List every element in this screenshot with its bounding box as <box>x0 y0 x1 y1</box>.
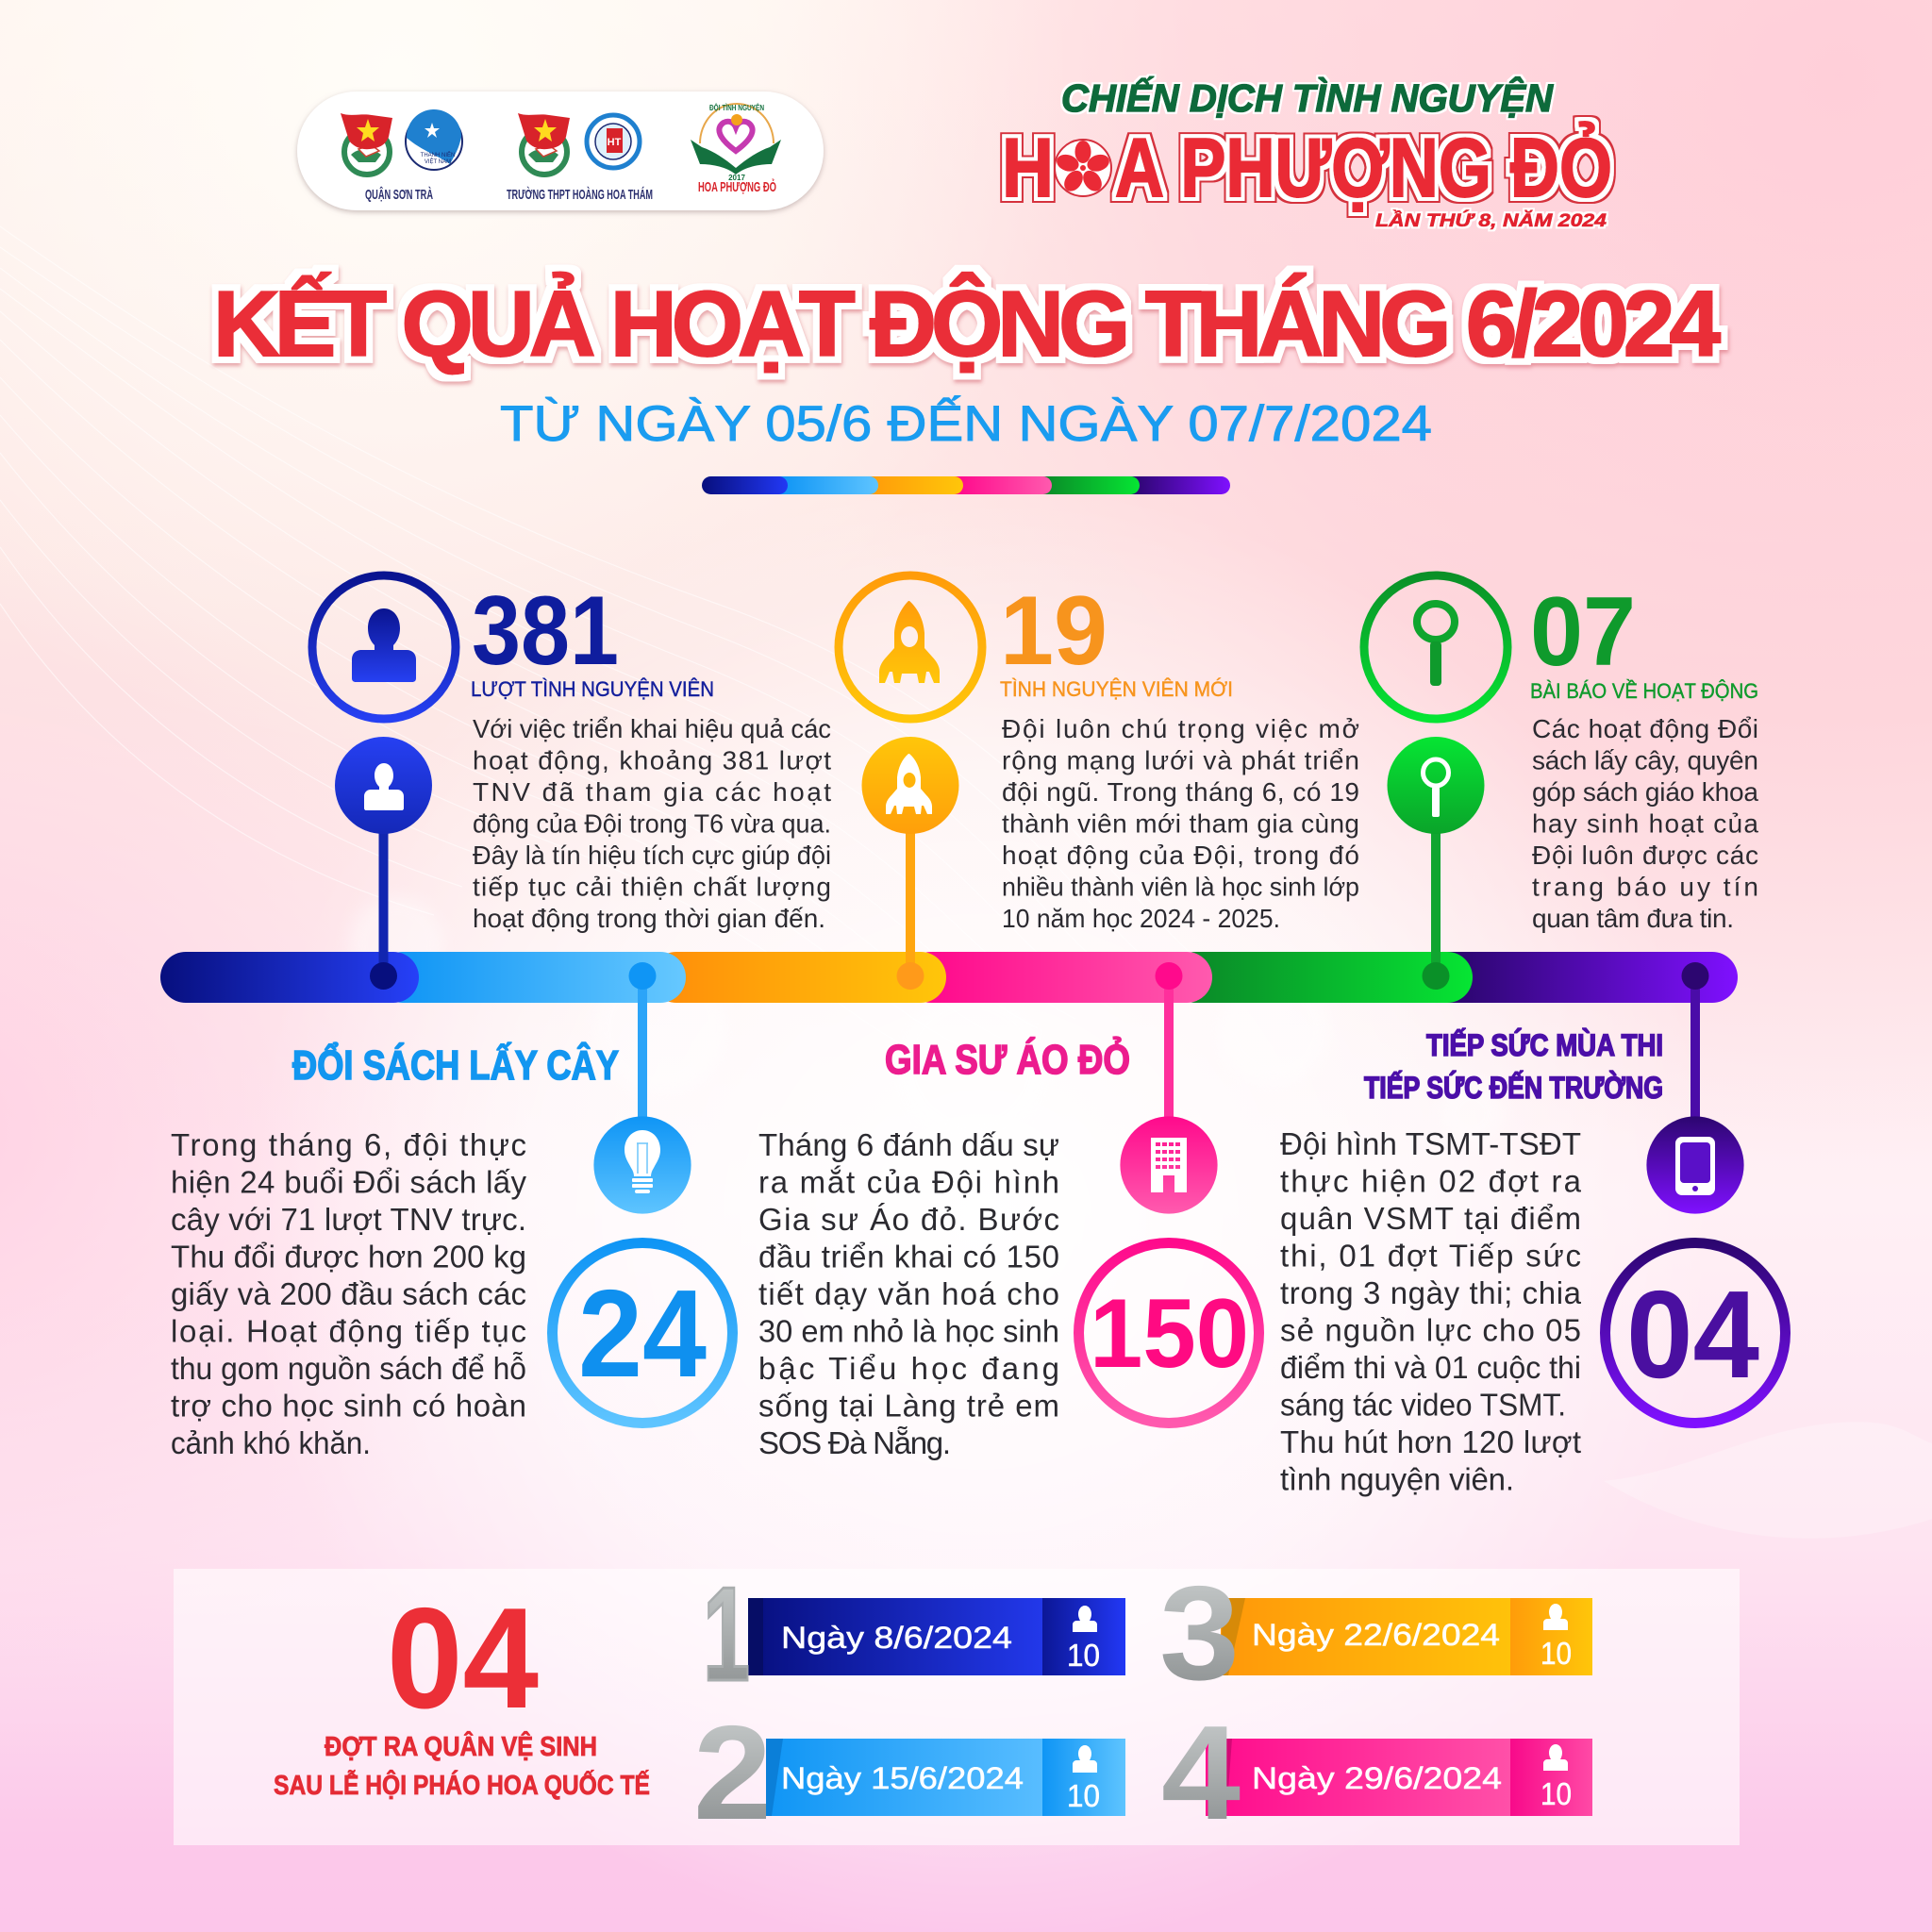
text block <box>1532 714 1758 933</box>
text block: thi, 01 đợt Tiếp sức <box>1280 1238 1581 1274</box>
text block: hoạt động của Đội, trong đó <box>1002 841 1359 870</box>
text block: điểm thi và 01 cuộc thi <box>1280 1350 1581 1385</box>
text block: thu gom nguồn sách để hỗ <box>171 1351 526 1386</box>
timeline bar <box>160 952 1738 1003</box>
main title: KẾT QUẢ HOẠT ĐỘNG THÁNG 6/2024 <box>213 272 1721 375</box>
panel: 07 press articles <box>1364 575 1758 990</box>
ribbon 3 <box>1159 1558 1592 1708</box>
label: new volunteers: TÌNH NGUYỆN VIÊN MỚI <box>1000 677 1233 701</box>
icon: volunteer team logo <box>691 104 781 195</box>
text block: trợ cho học sinh có hoàn <box>171 1389 526 1423</box>
label: volunteer turns: LƯỢT TÌNH NGUYỆN VIÊN <box>471 677 714 701</box>
panel: book exchange <box>171 962 732 1460</box>
text block: quan tâm đưa tin. <box>1532 904 1734 933</box>
icon: phoenix flower <box>1055 140 1111 196</box>
label: school: TRƯỜNG THPT HOÀNG HOA THÁM <box>507 186 653 203</box>
icon: volunteer team logo: HOA PHƯỢNG ĐỎ <box>698 178 776 195</box>
text block: Với việc triển khai hiệu quả các <box>473 714 831 743</box>
text block: 10 năm học 2024 - 2025. <box>1002 904 1280 933</box>
panel: cleanup campaign <box>174 1558 1740 1848</box>
text block: Đội luôn được các <box>1532 841 1758 870</box>
text block: cây với 71 lượt TNV trực. <box>171 1202 526 1237</box>
caption: SAU LỄ HỘI PHÁO HOA QUỐC TẾ <box>274 1769 650 1801</box>
icon: Vietnam youth federation badge: VIỆT NAM <box>425 158 451 165</box>
icon: big magnifier ring <box>1364 575 1507 719</box>
text block <box>473 714 831 933</box>
text block: Đây là tín hiệu tích cực giúp đội <box>473 841 831 870</box>
subtitle: date range: TỪ NGÀY 05/6 ĐẾN NGÀY 07/7/2024 <box>500 395 1432 452</box>
text block: Thu đổi được hơn 200 kg <box>171 1240 526 1274</box>
icon: small rocket circle with stem <box>862 737 958 990</box>
text block: hiện 24 buổi Đổi sách lấy <box>171 1164 526 1200</box>
text block <box>1002 714 1359 933</box>
edition note: LẦN THỨ 8, NĂM 2024 <box>1375 210 1607 231</box>
stat ring: 24 <box>553 1243 732 1423</box>
text block: nhiều thành viên là học sinh lớp <box>1002 872 1359 902</box>
text block: trang báo uy tín <box>1532 872 1758 902</box>
text block: thực hiện 02 đợt ra <box>1280 1164 1582 1198</box>
panel: exam support <box>1280 962 1785 1496</box>
text block: hoạt động, khoảng 381 lượt <box>473 745 831 775</box>
logo pill <box>297 92 824 210</box>
text block: trong 3 ngày thi; chia <box>1280 1275 1582 1310</box>
icon: big rocket ring <box>839 575 982 719</box>
text block: sách lấy cây, quyên <box>1532 745 1758 775</box>
ribbon 1: 1 <box>703 1559 750 1709</box>
text block: loại. Hoạt động tiếp tục <box>171 1313 526 1349</box>
text block: TNV đã tham gia các hoạt <box>473 777 831 807</box>
heading: TIẾP SỨC MÙA THI <box>1426 1028 1663 1062</box>
text block <box>758 1127 1059 1460</box>
text block: đội ngũ. Trong tháng 6, có 19 <box>1002 777 1359 807</box>
ribbon 1: Ngày 8/6/2024 <box>781 1621 1012 1655</box>
text block: Tháng 6 đánh dấu sự <box>758 1127 1059 1162</box>
text block: sáng tác video TSMT. <box>1280 1387 1566 1423</box>
ribbon 3: 3 <box>1159 1558 1240 1708</box>
icon: volunteer team logo: 2017 <box>728 174 745 182</box>
icon: youth union badge, school <box>518 113 570 175</box>
panel: 19 new volunteers <box>839 575 1359 990</box>
text block: Đội hình TSMT-TSĐT <box>1280 1126 1581 1161</box>
label: district: QUẬN SƠN TRÀ <box>365 186 433 203</box>
campaign name: Hoa Phượng Đỏ: A PHƯỢNG ĐỎ <box>1115 121 1612 214</box>
text block <box>171 1127 526 1460</box>
ribbon 1: 10 <box>1067 1638 1100 1673</box>
icon: volunteer team logo: ĐỘI TÌNH NGUYỆN <box>709 104 764 112</box>
text block: Gia sư Áo đỏ. Bước <box>758 1202 1059 1237</box>
ribbon 4 <box>1161 1698 1592 1848</box>
campaign title: CHIẾN DỊCH TÌNH NGUYỆN <box>1061 76 1554 120</box>
text block: cảnh khó khăn. <box>171 1425 371 1460</box>
text block: Thu hút hơn 120 lượt <box>1280 1424 1581 1459</box>
stat: 19: 19 <box>1000 576 1108 686</box>
icon: small person circle with stem <box>335 737 432 990</box>
ribbon 3: 10 <box>1541 1636 1572 1671</box>
icon: school seal <box>587 115 640 168</box>
ribbon 2: 2 <box>693 1698 772 1848</box>
text block: sẻ nguồn lực cho 05 <box>1280 1313 1581 1347</box>
stat ring: 150 <box>1079 1243 1258 1423</box>
panel: 381 volunteers <box>312 575 831 990</box>
text block: sống tại Làng trẻ em <box>758 1389 1059 1423</box>
text block: hay sinh hoạt của <box>1532 809 1758 838</box>
text block: ra mắt của Đội hình <box>758 1164 1059 1200</box>
ribbon 2: Ngày 15/6/2024 <box>781 1761 1024 1795</box>
ribbon 4: Ngày 29/6/2024 <box>1252 1761 1502 1795</box>
icon: Vietnam youth federation badge <box>406 109 462 170</box>
text block: Đội luôn chú trọng việc mở <box>1002 714 1359 743</box>
stat: 381: 381 <box>472 576 619 686</box>
campaign name: Hoa Phượng Đỏ: H <box>1002 121 1054 214</box>
panel: red shirt tutors <box>758 962 1258 1460</box>
text block: thành viên mới tham gia cùng <box>1002 809 1359 838</box>
text block <box>1280 1126 1582 1496</box>
icon: building circle with stem <box>1120 962 1218 1214</box>
text block: tiếp tục cải thiện chất lượng <box>473 872 831 902</box>
caption <box>274 1730 650 1801</box>
heading: ĐỔI SÁCH LẤY CÂY <box>292 1041 619 1089</box>
heading: GIA SƯ ÁO ĐỎ <box>885 1035 1130 1083</box>
text block: góp sách giáo khoa <box>1532 777 1758 807</box>
icon: big person ring <box>312 575 456 719</box>
text block: 30 em nhỏ là học sinh <box>758 1313 1059 1349</box>
text block: Các hoạt động Đổi <box>1532 714 1758 743</box>
ribbon 3: Ngày 22/6/2024 <box>1252 1618 1500 1652</box>
text block: hoạt động trong thời gian đến. <box>473 904 825 933</box>
campaign name: Hoa Phượng Đỏ <box>1002 121 1612 214</box>
caption: ĐỢT RA QUÂN VỆ SINH <box>325 1730 597 1762</box>
stat: 07: 07 <box>1530 577 1636 687</box>
icon: school seal: HT <box>608 137 622 148</box>
text block: SOS Đà Nẵng. <box>758 1425 951 1460</box>
colour strip divider <box>702 476 1230 494</box>
ribbon 2: 10 <box>1067 1778 1100 1813</box>
ribbon 1 <box>703 1559 1125 1709</box>
text block: rộng mạng lưới và phát triển <box>1002 745 1359 775</box>
ribbon 2 <box>693 1698 1125 1848</box>
text block: tiết dạy văn hoá cho <box>758 1276 1059 1311</box>
text block: đầu triển khai có 150 <box>758 1240 1059 1274</box>
ribbon 4: 10 <box>1541 1776 1572 1811</box>
icon: Vietnam youth federation badge: THANH NIÊN <box>421 151 455 158</box>
stat: 04 cleanups: 04 <box>387 1578 539 1739</box>
stat ring: 24: 24 <box>578 1264 707 1403</box>
ribbon 4: 4 <box>1161 1698 1241 1848</box>
stat ring: 150: 150 <box>1090 1279 1249 1389</box>
icon: bulb circle with stem <box>593 962 691 1214</box>
text block: tình nguyện viên. <box>1280 1462 1514 1496</box>
heading: TIẾP SỨC ĐẾN TRƯỜNG <box>1364 1071 1663 1105</box>
stat ring: 04: 04 <box>1626 1265 1759 1404</box>
text block: bậc Tiểu học đang <box>758 1351 1059 1386</box>
text block: quân VSMT tại điểm <box>1280 1201 1581 1236</box>
icon: phone circle with stem <box>1646 962 1744 1214</box>
icon: small magnifier circle with stem <box>1387 737 1485 990</box>
text block: giấy và 200 đầu sách các <box>171 1276 526 1311</box>
icon: youth union badge, district <box>341 113 392 175</box>
text block: động của Đội trong T6 vừa qua. <box>473 809 831 838</box>
stat ring: 04 <box>1606 1243 1785 1423</box>
label: press articles: BÀI BÁO VỀ HOẠT ĐỘNG <box>1530 679 1758 703</box>
heading <box>1364 1028 1663 1105</box>
text block: Trong tháng 6, đội thực <box>171 1127 526 1162</box>
